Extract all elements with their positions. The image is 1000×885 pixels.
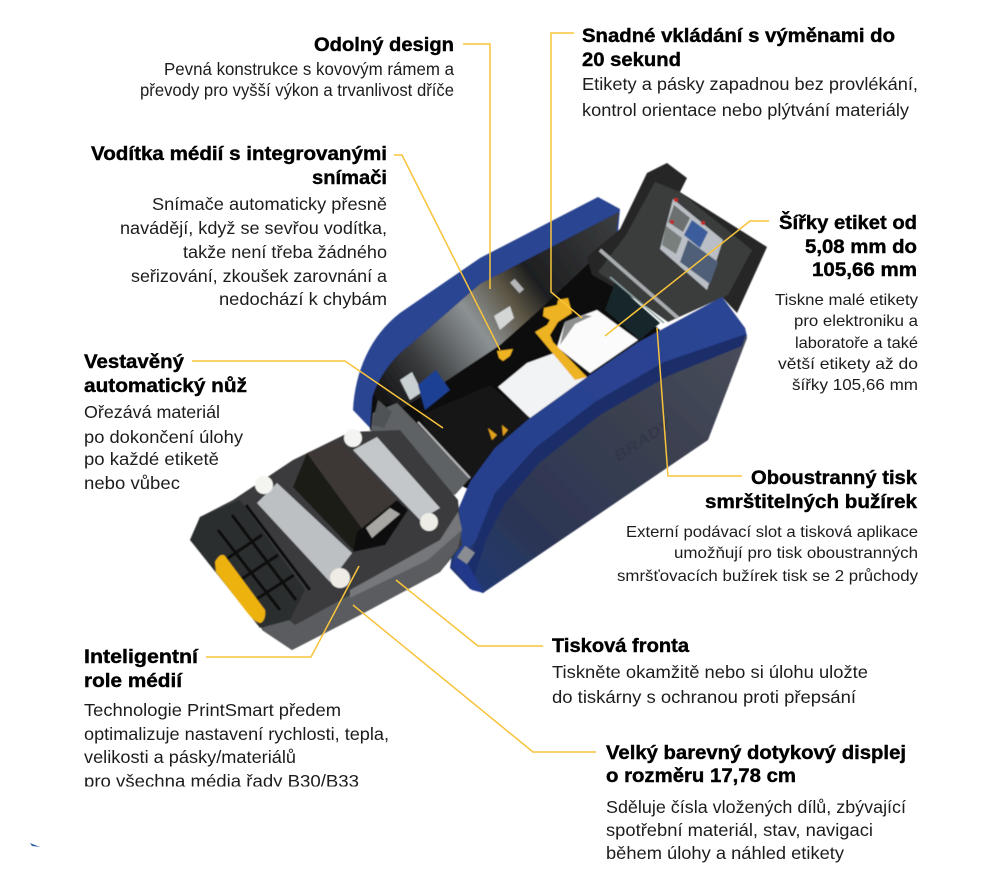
callout: odolný design — [140, 35, 454, 100]
leader line: automatický nůž — [192, 361, 443, 428]
stray blue mark — [30, 843, 40, 847]
callout: inteligentní role: velikosti a pásky/materiálů — [84, 747, 296, 767]
callout: odolný design: Odolný design — [314, 35, 454, 56]
callout: automatický nůž: automatický nůž — [84, 376, 247, 397]
yellow media guide — [497, 298, 587, 380]
printer photo — [190, 163, 767, 650]
callout: šířky etiket: Tiskne malé etikety — [775, 292, 918, 309]
callout: šířky etiket: 5,08 mm do — [805, 237, 917, 258]
callout: tisková fronta: Tisková fronta — [552, 636, 689, 657]
callout: snadné vkládání: kontrol orientace nebo plýtvání materiály — [582, 100, 909, 120]
callout: oboustranný tisk: umožňují pro tisk oboustranných — [674, 545, 918, 562]
callout: vodítka médií: Vodítka médií s integrovanými — [91, 144, 387, 165]
callout: dotykový displej — [606, 743, 906, 863]
callout: automatický nůž: po každé etiketě — [84, 449, 219, 469]
leader line: inteligentní role — [206, 566, 359, 657]
callout: vodítka médií: snímači — [312, 168, 387, 189]
callout: vodítka médií: nedochází k chybám — [219, 289, 387, 309]
leader line: tisková fronta — [396, 580, 543, 646]
callout: šířky etiket: Šířky etiket od — [779, 212, 917, 234]
front blue shell — [450, 297, 747, 593]
printer interior — [370, 212, 660, 490]
callout: šířky etiket: šířky 105,66 mm — [792, 377, 918, 394]
callout: snadné vkládání: Etikety a pásky zapadnou bez provlékání, — [582, 74, 918, 94]
leader line: odolný design — [463, 44, 490, 289]
callout: inteligentní role: role médií — [84, 671, 183, 692]
callout: snadné vkládání: Snadné vkládání s výměnami do — [582, 26, 895, 47]
callout: inteligentní role: Inteligentní — [84, 647, 199, 668]
callout: vodítka médií: seřizování, zkoušek zarovnání a — [131, 266, 387, 286]
yellow handle — [215, 555, 265, 623]
media roll — [498, 310, 638, 420]
callout: oboustranný tisk: Externí podávací slot a tisková aplikace — [626, 524, 918, 541]
callout: oboustranný tisk: smršťovacích bužírek tisk se 2 průchody — [617, 567, 918, 585]
callout: oboustranný tisk — [617, 468, 918, 585]
callout: automatický nůž — [84, 352, 247, 493]
cutter area — [370, 385, 535, 495]
callout: dotykový displej: Velký barevný dotykový displej — [606, 743, 906, 764]
callout: odolný design: Pevná konstrukce s kovovým rámem a — [164, 59, 454, 79]
callout: šířky etiket — [775, 212, 918, 394]
shell rim — [454, 297, 747, 568]
callout: dotykový displej: spotřební materiál, stav, navigaci — [606, 820, 873, 840]
open lid — [587, 163, 767, 322]
callout: oboustranný tisk: smrštitelných bužírek — [705, 492, 917, 513]
callout: inteligentní role: pro všechna média řady B30/B33 — [84, 771, 359, 791]
leader line: vodítka médií — [394, 155, 500, 350]
callout: vodítka médií: navádějí, když se sevřou vodítka, — [120, 218, 387, 238]
callout: dotykový displej: Sděluje čísla vložených dílů, zbývající — [606, 797, 906, 817]
ribbon cartridge — [293, 440, 408, 552]
callout: tisková fronta: do tiskárny s ochranou proti přepsání — [552, 687, 856, 707]
cartridge tray — [190, 430, 462, 650]
callout: snadné vkládání: 20 sekund — [582, 50, 681, 71]
callout: dotykový displej: o rozměru 17,78 cm — [606, 766, 796, 787]
callout: odolný design: převody pro vyšší výkon a trvanlivost dříče — [140, 80, 454, 100]
tray front face — [262, 530, 462, 650]
callout: automatický nůž: po dokončení úlohy — [84, 427, 243, 447]
callout: vodítka médií — [91, 144, 387, 309]
leader line: displej — [353, 605, 596, 752]
callout: šířky etiket: laboratoře a také — [795, 335, 918, 352]
leader line: snadné vkládání — [551, 33, 582, 318]
leader line: oboustranný tisk — [657, 328, 742, 476]
right ribbon spool — [344, 429, 440, 531]
callout: automatický nůž: Vestavěný — [84, 352, 184, 373]
callout: šířky etiket: větší etikety až do — [778, 356, 918, 373]
logo: BRADY — [611, 414, 677, 465]
callout: tisková fronta: Tiskněte okamžitě nebo si úlohu uložte — [552, 662, 868, 682]
callout: automatický nůž: Ořezává materiál — [84, 402, 220, 422]
rear interior wall — [372, 212, 619, 410]
left ribbon spool — [255, 476, 352, 588]
leader line: šířky etiket — [605, 221, 769, 336]
callout: šířky etiket: 105,66 mm — [812, 260, 917, 281]
callout: inteligentní role — [84, 647, 389, 791]
tray rack — [190, 500, 305, 628]
guide rod — [600, 250, 678, 318]
callout: vodítka médií: takže není třeba žádného — [183, 242, 387, 262]
lid sticker — [660, 198, 723, 290]
callout: automatický nůž: nebo vůbec — [84, 473, 180, 493]
callout: šířky etiket: pro elektroniku a — [794, 313, 918, 330]
callout: dotykový displej: během úlohy a náhled etikety — [606, 843, 844, 863]
callout: vodítka médií: Snímače automaticky přesně — [152, 194, 387, 214]
callout: oboustranný tisk: Oboustranný tisk — [751, 468, 917, 489]
callout: snadné vkládání — [582, 26, 918, 120]
callout: tisková fronta — [552, 636, 868, 707]
callout: inteligentní role: optimalizuje nastavení rychlosti, tepla, — [84, 724, 389, 744]
wall hardware — [510, 279, 524, 293]
rear blue shell — [353, 197, 620, 430]
callout: inteligentní role: Technologie PrintSmart předem — [84, 700, 341, 720]
